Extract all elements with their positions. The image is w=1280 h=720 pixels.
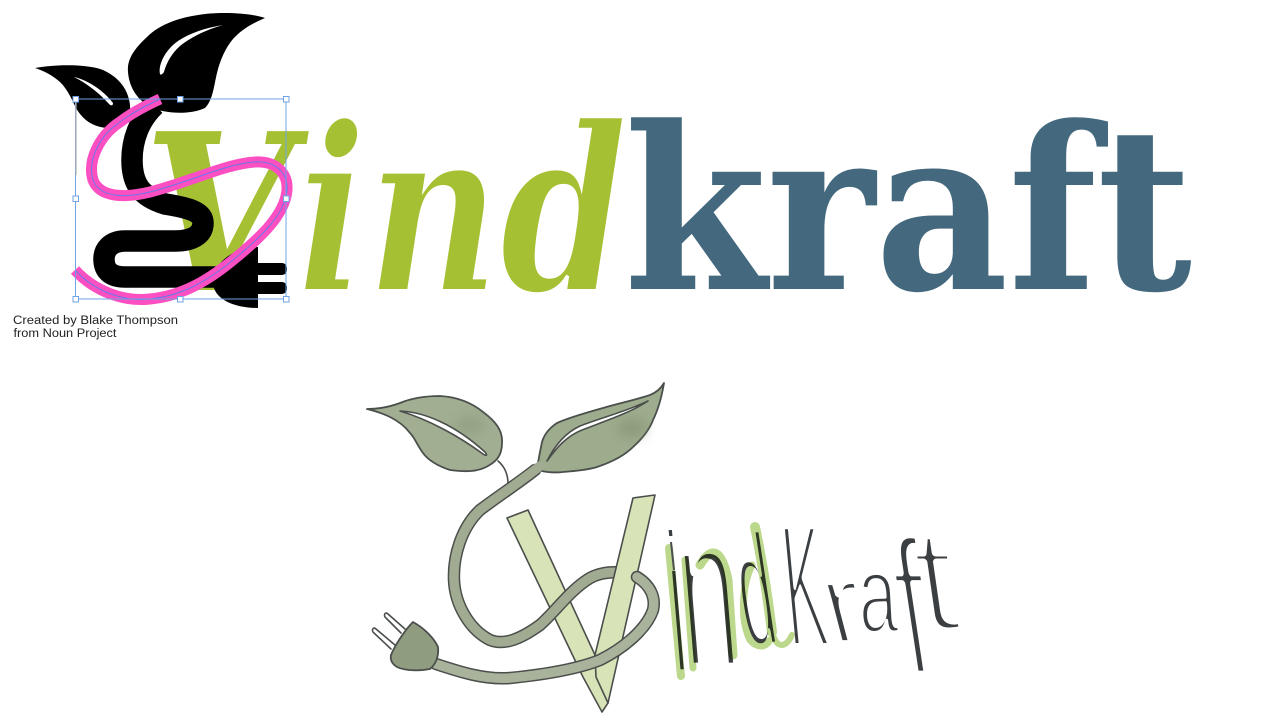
- handwritten letters: indKraft: i: [656, 487, 697, 719]
- icon: power cord: [104, 105, 225, 277]
- handwritten wordmark: [656, 467, 968, 719]
- selected vector path with bounding box: [73, 96, 289, 302]
- handwritten letters: indKraft: n: [668, 467, 747, 715]
- wordmark: V: V: [122, 85, 317, 342]
- sketch: plug: [373, 613, 438, 670]
- handwritten letters: indKraft: d: [724, 502, 786, 680]
- green brush strokes: [669, 527, 792, 676]
- icon credit: [13, 315, 178, 340]
- icon: plug: [213, 247, 287, 308]
- handwritten letters: indKraft: t: [903, 498, 968, 661]
- sketch: leaf stem: [498, 461, 508, 484]
- icon credit: from Noun Project: [14, 328, 117, 340]
- sketch: letter V left stroke: [507, 510, 608, 712]
- watercolor logo sketch: [367, 383, 664, 712]
- blue path line: [75, 99, 287, 300]
- i stem extension stroke: [671, 542, 674, 570]
- wordmark: ind: ind: [297, 76, 628, 346]
- wordmark: kraft: kraft: [624, 78, 1192, 343]
- sketch: cord upper loop: [454, 466, 637, 642]
- handwritten letters: indKraft: r: [804, 540, 881, 668]
- sketch: left leaf: [367, 396, 508, 484]
- bounding box: [76, 99, 286, 299]
- sketch: right leaf: [537, 383, 664, 472]
- handwritten letters: indKraft: a: [854, 532, 901, 656]
- icon: small leaf: [35, 65, 130, 128]
- handwritten letters: indKraft: K: [775, 487, 834, 686]
- sketch: cord lower loop: [436, 577, 654, 678]
- handwritten letters: indKraft: [656, 467, 968, 719]
- icon: large leaf: [128, 13, 265, 113]
- handwritten letters: indKraft: f: [880, 498, 944, 717]
- icon: black plant and plug: [35, 13, 287, 308]
- pink cord path: [75, 99, 287, 300]
- selection handles: [73, 96, 289, 302]
- sketch: letter V right stroke: [595, 495, 655, 703]
- digital wordmark: [122, 76, 1192, 346]
- icon credit: Created by Blake Thompson: [13, 315, 178, 327]
